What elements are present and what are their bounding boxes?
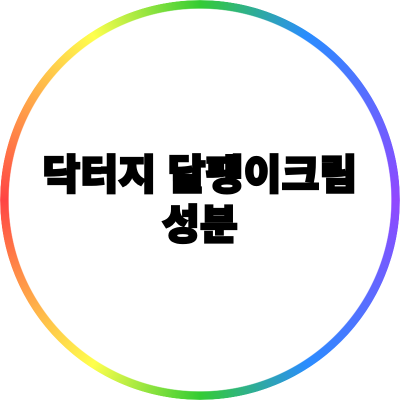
title: 성분 xyxy=(162,202,238,248)
title: 닥터지 달팽이크림 xyxy=(43,152,357,198)
title xyxy=(43,152,357,248)
